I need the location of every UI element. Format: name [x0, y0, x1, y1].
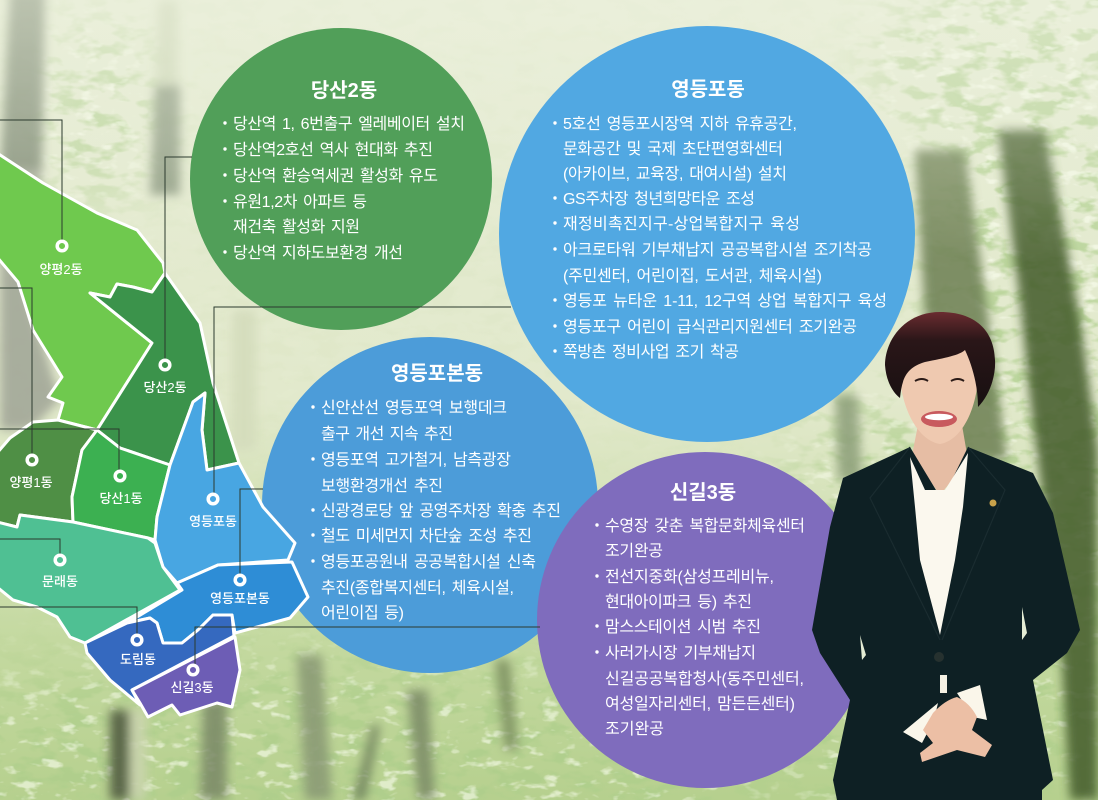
list: 당산2동 pledges — [223, 115, 465, 262]
region: 당산1동 — [72, 430, 170, 540]
teeth — [925, 414, 953, 420]
connector lines and map markers — [0, 120, 540, 675]
list: 신길3동 pledges: 조기완공 — [605, 542, 663, 560]
list: 영등포동 pledges: 재정비촉진지구-상업복합지구 육성 — [563, 215, 800, 233]
list: 영등포본동 pledges: 보행환경개선 추진 — [321, 477, 443, 495]
map labels: 도림동 — [120, 652, 156, 667]
heading: 영등포동: 영등포동 — [671, 78, 745, 101]
lapel edges — [870, 447, 1005, 640]
map labels: 당산1동 — [99, 491, 143, 506]
region: 신길3동 — [132, 637, 240, 717]
region: 영등포동 — [155, 393, 295, 583]
list: 영등포본동 pledges: 영등포공원내 공공복합시설 신축 — [321, 553, 536, 571]
list: 영등포본동 pledges: 어린이집 등) — [321, 604, 404, 622]
neck — [912, 425, 968, 495]
list: 영등포본동 pledges: 신광경로당 앞 공영주차장 확충 추진 — [321, 502, 561, 520]
list: 당산2동 pledges: 당산역 지하도보환경 개선 — [233, 244, 403, 262]
hands — [920, 697, 992, 762]
map labels: 당산2동 — [143, 380, 187, 395]
list: 영등포동 pledges: 5호선 영등포시장역 지하 유휴공간, — [563, 115, 797, 133]
region: 영등포본동 — [127, 562, 308, 643]
region: 양평1동 — [0, 420, 97, 527]
panel: 영등포동 circle — [499, 26, 915, 442]
list: 영등포동 pledges: 영등포 뉴타운 1-11, 12구역 상업 복합지구 육성 — [563, 292, 887, 310]
face — [900, 339, 978, 444]
list: 신길3동 pledges: 맘스스테이션 시범 추진 — [605, 618, 761, 636]
shirt hem — [940, 675, 947, 693]
eyes — [915, 379, 964, 381]
panel: 영등포본동 circle — [262, 337, 598, 673]
button — [934, 652, 944, 662]
list: 신길3동 pledges: 전선지중화(삼성프레비뉴, — [605, 568, 774, 586]
list: 신길3동 pledges: 여성일자리센터, 맘든든센터) — [605, 695, 795, 713]
list: 영등포본동 pledges: 추진(종합복지센터, 체육시설, — [321, 579, 514, 597]
panel: 신길3동 circle — [537, 452, 873, 788]
list: 영등포동 pledges — [553, 115, 887, 361]
list: 영등포본동 pledges: 철도 미세먼지 차단숲 조성 추진 — [321, 527, 532, 545]
region: 문래동 — [0, 515, 180, 643]
list: 영등포동 pledges: GS주차장 청년희망타운 조성 — [563, 190, 755, 208]
list: 당산2동 pledges: 당산역 1, 6번출구 엘레베이터 설치 — [233, 115, 465, 133]
list: 영등포동 pledges: (아카이브, 교육장, 대여시설) 설치 — [563, 165, 787, 183]
cuffs — [903, 685, 987, 743]
list: 당산2동 pledges: 유원1,2차 아파트 등 — [233, 193, 367, 211]
map labels: 신길3동 — [170, 680, 214, 695]
list: 영등포동 pledges: 쪽방촌 정비사업 조기 착공 — [563, 343, 739, 361]
list: 신길3동 pledges: 현대아이파크 등) 추진 — [605, 593, 752, 611]
list: 영등포동 pledges: 영등포구 어린이 급식관리지원센터 조기완공 — [563, 318, 857, 336]
map labels: 양평2동 — [39, 262, 83, 277]
region: 양평2동 — [0, 153, 165, 430]
list: 영등포동 pledges: 문화공간 및 국제 초단편영화센터 — [563, 140, 783, 158]
map labels — [9, 262, 270, 695]
region: 당산2동 — [90, 273, 239, 470]
map labels: 문래동 — [42, 574, 78, 589]
figure: smiling woman in dark suit — [812, 312, 1080, 800]
panel: district map — [0, 153, 308, 717]
list: 영등포본동 pledges — [311, 399, 561, 622]
map labels: 양평1동 — [9, 475, 53, 490]
list: 신길3동 pledges: 사러가시장 기부채납지 — [605, 644, 756, 662]
panel: 당산2동 circle — [190, 28, 492, 330]
list: 영등포동 pledges: 아크로타워 기부채납지 공공복합시설 조기착공 — [563, 241, 872, 259]
region: 도림동 — [85, 615, 234, 705]
smile — [921, 411, 957, 427]
list: 신길3동 pledges: 수영장 갖춘 복합문화체육센터 — [605, 517, 805, 535]
heading: 영등포본동: 영등포본동 — [391, 362, 483, 385]
lapel pin — [990, 500, 996, 506]
list: 영등포동 pledges: (주민센터, 어린이집, 도서관, 체육시설) — [563, 267, 822, 285]
hair — [885, 312, 995, 407]
list: 신길3동 pledges: 신길공공복합청사(동주민센터, — [605, 670, 804, 688]
shirt — [910, 453, 968, 635]
heading: 신길3동: 신길3동 — [670, 481, 736, 504]
list: 당산2동 pledges: 당산역 환승역세권 활성화 유도 — [233, 167, 438, 185]
list: 영등포본동 pledges: 영등포역 고가철거, 남측광장 — [321, 451, 511, 469]
map labels: 영등포본동 — [210, 591, 270, 606]
list: 영등포본동 pledges: 출구 개선 지속 추진 — [321, 425, 453, 443]
list: 신길3동 pledges — [595, 517, 805, 738]
list: 당산2동 pledges: 재건축 활성화 지원 — [233, 218, 360, 236]
heading: 당산2동: 당산2동 — [311, 79, 377, 102]
list: 신길3동 pledges: 조기완공 — [605, 720, 664, 738]
arm gaps — [860, 607, 1027, 660]
jacket — [812, 447, 1080, 800]
list: 당산2동 pledges: 당산역2호선 역사 현대화 추진 — [233, 141, 433, 159]
list: 영등포본동 pledges: 신안산선 영등포역 보행데크 — [321, 399, 507, 417]
map labels: 영등포동 — [189, 514, 237, 529]
